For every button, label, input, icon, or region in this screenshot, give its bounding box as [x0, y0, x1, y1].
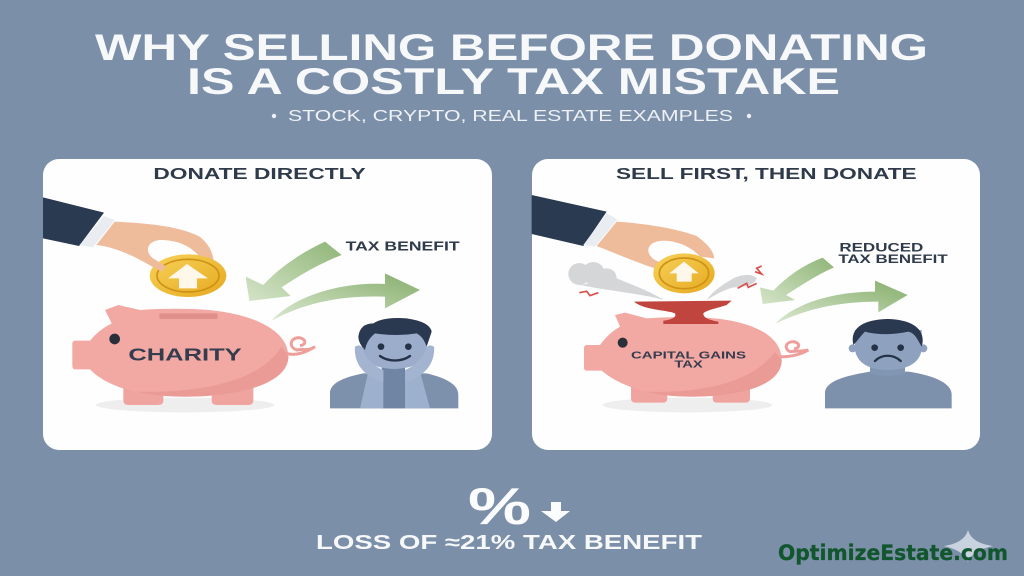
icon: sad person: [825, 319, 952, 408]
label: reduced tax benefit: TAX BENEFIT: [838, 252, 948, 266]
icon: sparkle: [944, 530, 993, 562]
icon: piggy bank charity: CHARITY: [128, 345, 242, 365]
icon: hand with coin: [532, 195, 714, 270]
title: WHY SELLING BEFORE DONATING: [95, 27, 928, 68]
arrow: reduced tax benefit incoming: [760, 258, 834, 304]
icon: percent down: [468, 478, 570, 536]
panel: donate directly: [43, 159, 492, 450]
callout: loss of tax benefit: LOSS OF ≈21% TAX BENEFIT: [316, 532, 702, 554]
subtitle: STOCK, CRYPTO, REAL ESTATE EXAMPLES: [288, 108, 733, 125]
subtitle: [272, 108, 751, 125]
title: IS A COSTLY TAX MISTAKE: [187, 61, 840, 102]
panel heading: DONATE DIRECTLY: [153, 166, 366, 183]
label: reduced tax benefit: REDUCED: [839, 240, 923, 254]
panel: sell first then donate: [532, 159, 980, 450]
icon: piggy bank capital gains tax: CAPITAL GAINS: [631, 350, 746, 361]
icon: hand with coin: [43, 197, 226, 297]
icon: piggy bank capital gains tax: [584, 313, 808, 412]
panel background: [532, 159, 980, 450]
watermark: OptimizeEstate.com: [778, 541, 1008, 565]
arrow: reduced tax benefit outgoing: [775, 281, 908, 324]
icon: smoke, sparks, anvil and coin: [568, 253, 762, 324]
icon: happy person: [330, 318, 458, 408]
label: reduced tax benefit: [838, 240, 948, 266]
arrow: tax benefit incoming: [246, 242, 342, 301]
arrow: tax benefit outgoing: [272, 273, 420, 321]
panel background: [43, 159, 492, 450]
panel heading: SELL FIRST, THEN DONATE: [616, 166, 917, 183]
label: tax benefit: TAX BENEFIT: [346, 240, 460, 254]
anvil: [634, 301, 732, 324]
icon: percent down: %: [468, 478, 531, 536]
icon: piggy bank charity: [72, 305, 315, 412]
title: [95, 27, 928, 102]
icon: piggy bank capital gains tax: TAX: [674, 359, 703, 370]
